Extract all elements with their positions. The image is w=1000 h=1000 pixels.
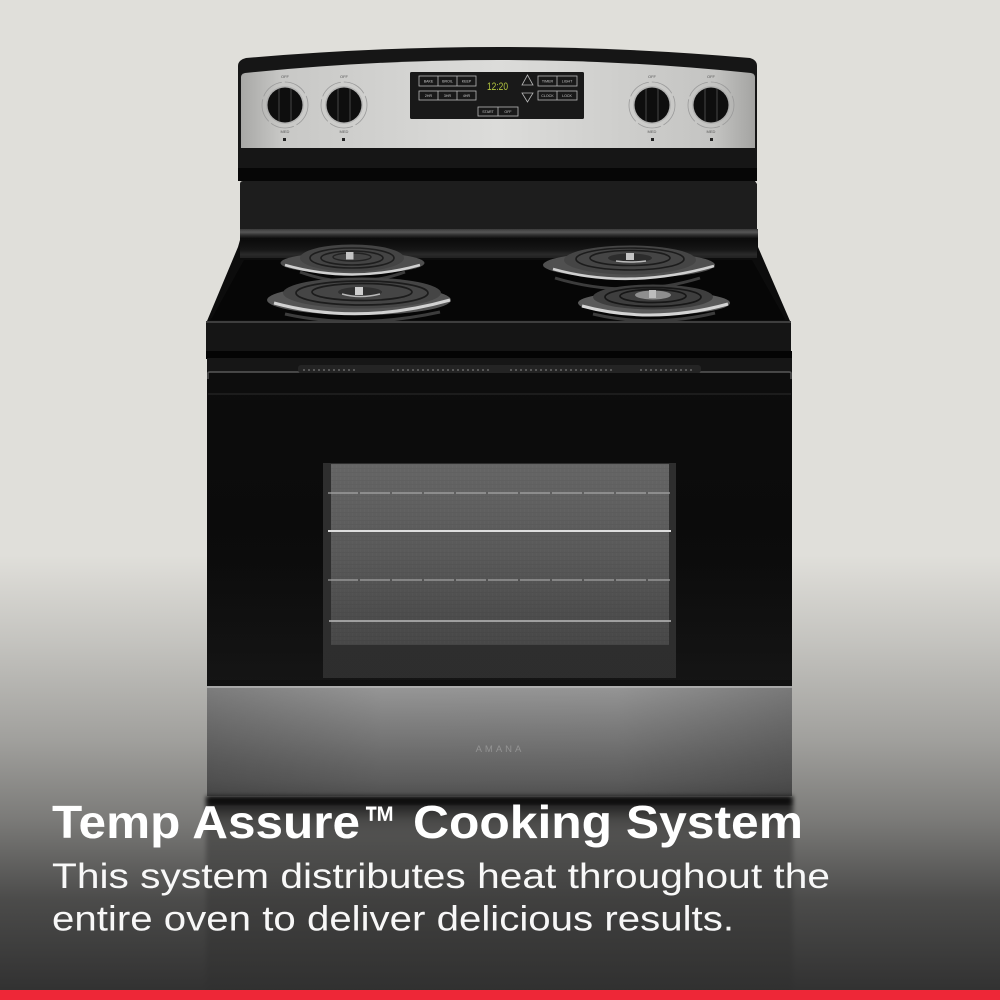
button labels: LIGHT	[562, 80, 573, 84]
button labels: TIMER	[542, 80, 553, 84]
clock readout: 12:20	[487, 81, 508, 93]
red footer bar	[0, 990, 1000, 1000]
button labels: CLOCK	[541, 94, 554, 98]
control panel	[238, 47, 757, 168]
button labels: 3HR	[444, 94, 451, 98]
heading	[52, 796, 803, 848]
heading: Temp Assure	[52, 796, 360, 848]
button labels	[424, 80, 573, 114]
digital display	[410, 72, 584, 119]
button labels: 2HR	[425, 94, 432, 98]
brand logo: AMANA	[476, 744, 524, 755]
burner back left	[280, 244, 424, 282]
vent slot	[298, 365, 701, 373]
knob: left front: MED	[340, 129, 349, 134]
button labels: BAKE	[424, 80, 434, 84]
knob: right rear	[688, 74, 734, 141]
knob: left front	[321, 74, 367, 141]
button labels: BROIL	[442, 80, 453, 84]
heading: Cooking System	[413, 796, 803, 848]
description text	[52, 856, 830, 938]
button labels: 4HR	[463, 94, 470, 98]
knob: right front: MED	[648, 129, 657, 134]
cooktop	[207, 240, 790, 322]
knob: right front	[629, 74, 675, 141]
rack 3	[328, 579, 670, 581]
shadow under range	[206, 796, 793, 1000]
knob: right rear: OFF	[707, 74, 716, 79]
knob: left rear	[262, 74, 308, 141]
oven door	[207, 358, 792, 684]
storage drawer	[207, 686, 792, 796]
heading: ™	[364, 796, 396, 848]
rack 4	[329, 620, 671, 622]
rack 2	[328, 530, 671, 532]
range oven	[206, 47, 793, 1000]
oven window	[323, 463, 676, 678]
drawer bottom shadow band	[208, 797, 791, 805]
description text: entire oven to deliver delicious results.	[52, 898, 734, 938]
button labels: OFF	[504, 110, 512, 114]
rack 1	[328, 492, 670, 494]
button labels: KEEP	[462, 80, 472, 84]
description text: This system distributes heat throughout the	[52, 856, 830, 896]
knobs	[262, 74, 734, 141]
knob: right rear: MED	[707, 129, 716, 134]
knob: left front: OFF	[340, 74, 349, 79]
knob: left rear: OFF	[281, 74, 290, 79]
knob: right front: OFF	[648, 74, 657, 79]
burner back right	[543, 246, 715, 289]
burner front right	[578, 284, 730, 321]
knob: left rear: MED	[281, 129, 290, 134]
button labels: LOCK	[562, 94, 572, 98]
burner front left	[267, 278, 451, 322]
button labels: START	[482, 110, 495, 114]
backguard	[238, 168, 758, 260]
cooktop front edge	[206, 321, 791, 352]
bottom gradient overlay	[0, 555, 1000, 991]
